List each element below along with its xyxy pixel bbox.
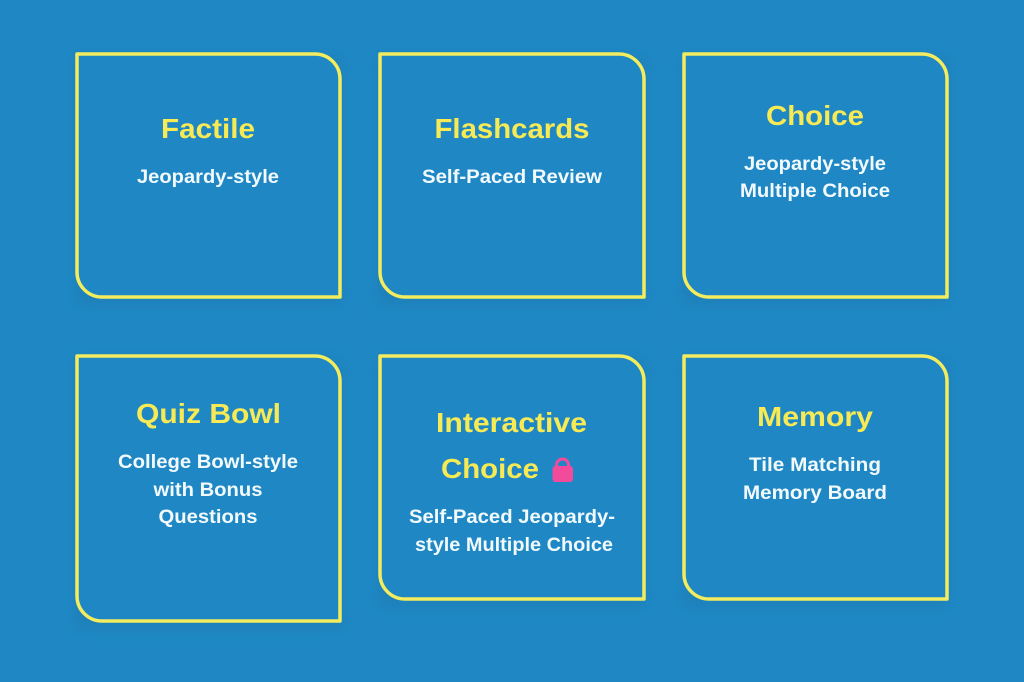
- heading: Quiz Bowl: Quiz Bowl: [136, 398, 281, 429]
- heading: Interactive Choice: [436, 407, 587, 484]
- description: Memory: [743, 455, 887, 504]
- description: Choice: Jeopardy-style: [744, 154, 886, 175]
- panel: Flashcards: [380, 54, 644, 303]
- description: Quiz Bowl: with Bonus: [152, 480, 262, 501]
- heading: Interactive Choice: Interactive: [436, 407, 587, 438]
- description: Quiz Bowl: Questions: [158, 507, 258, 528]
- panel: Memory: [684, 356, 947, 605]
- icon: pink lock: [552, 459, 573, 482]
- description: Choice: Multiple Choice: [740, 181, 890, 202]
- description: Choice: [740, 154, 890, 202]
- panel: Factile: [77, 54, 340, 303]
- description: Flashcards: Self-Paced Review: [422, 167, 602, 188]
- heading: Factile: Factile: [161, 113, 255, 144]
- panel: Choice: [684, 54, 947, 303]
- heading: Interactive Choice: Choice: [441, 453, 539, 484]
- description: Interactive Choice: Self-Paced Jeopardy-: [409, 507, 615, 528]
- description: Interactive Choice: style Multiple Choice: [415, 535, 613, 556]
- description: Memory: Memory Board: [743, 483, 887, 504]
- heading: Memory: Memory: [757, 401, 873, 432]
- description: Quiz Bowl: College Bowl-style: [118, 452, 298, 473]
- panel: Interactive Choice: [380, 356, 644, 605]
- description: Quiz Bowl: [118, 452, 298, 528]
- heading: Choice: Choice: [766, 100, 864, 131]
- panel: Quiz Bowl: [77, 356, 340, 627]
- heading: Flashcards: Flashcards: [434, 113, 590, 144]
- description: Interactive Choice: [409, 507, 615, 556]
- description: Factile: Jeopardy-style: [137, 167, 279, 188]
- description: Memory: Tile Matching: [749, 455, 881, 476]
